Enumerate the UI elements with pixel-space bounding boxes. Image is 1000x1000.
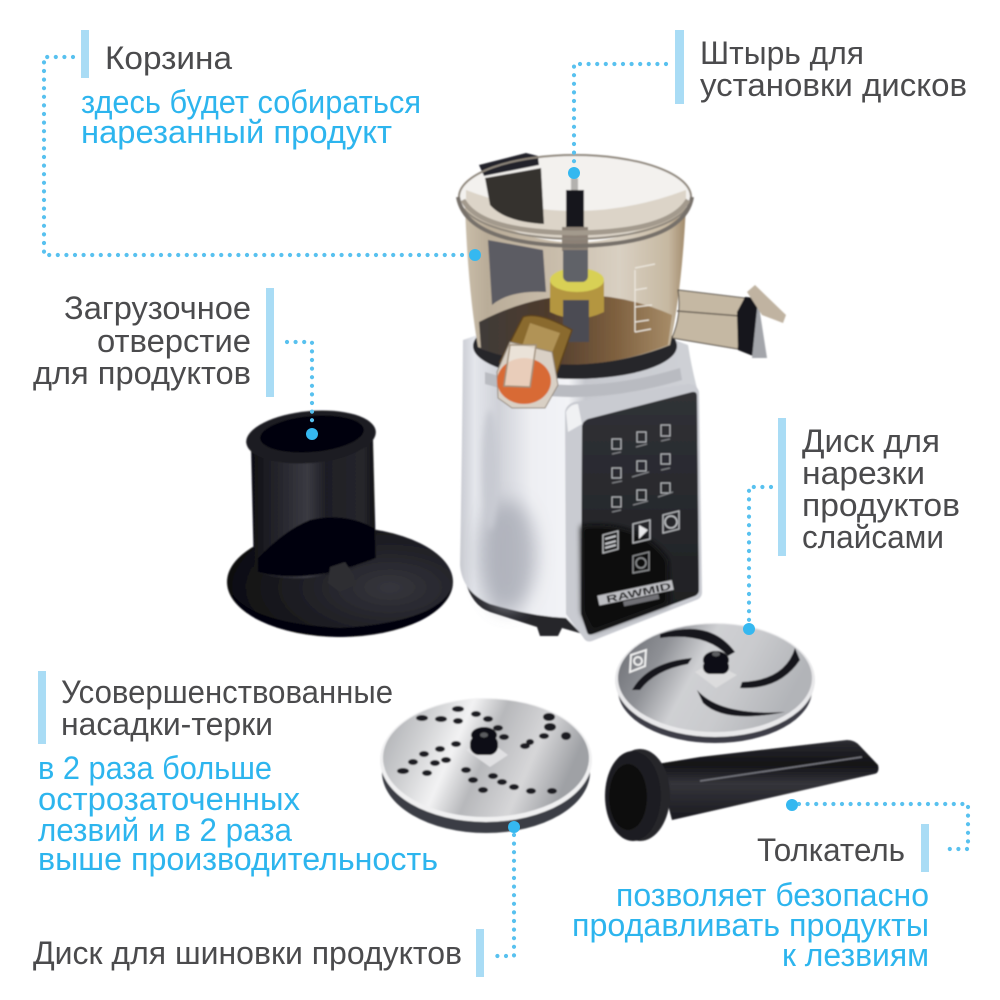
heading: Корзина bbox=[105, 40, 232, 76]
heading: Загрузочное bbox=[64, 290, 251, 326]
feeding lid with tube bbox=[227, 405, 453, 637]
description: лезвий и в 2 раза bbox=[38, 812, 292, 848]
leader line bbox=[749, 487, 771, 622]
heading: Толкатель bbox=[757, 832, 905, 868]
accent bar bbox=[778, 418, 786, 556]
marker bbox=[508, 821, 520, 833]
description: нарезанный продукт bbox=[81, 114, 392, 150]
callout: slicing disc bbox=[743, 418, 960, 635]
dark latch interior bbox=[485, 168, 544, 224]
leader line bbox=[492, 835, 514, 956]
collar shadow bbox=[485, 368, 682, 397]
shredding disc bbox=[380, 698, 592, 833]
description: острозаточенных bbox=[38, 781, 300, 817]
lid disc bbox=[227, 527, 453, 637]
accent bar bbox=[921, 824, 929, 872]
description: выше производительность bbox=[38, 841, 438, 877]
marker bbox=[469, 249, 481, 261]
leader line bbox=[799, 804, 968, 849]
measure scale bbox=[635, 264, 655, 332]
basket interior bbox=[460, 155, 690, 239]
heading: насадки-терки bbox=[61, 706, 273, 742]
leader line bbox=[287, 342, 312, 426]
heading: Диск для шиновки продуктов bbox=[33, 935, 462, 971]
contents in basket bbox=[479, 295, 672, 365]
left body shade bbox=[482, 410, 498, 530]
accent bar bbox=[38, 671, 46, 744]
heading: установки дисков bbox=[700, 67, 967, 103]
basket translucent body bbox=[465, 205, 686, 364]
product: food processor and accessories bbox=[227, 153, 878, 841]
right side spout bbox=[672, 285, 786, 358]
panel control buttons bbox=[603, 511, 679, 573]
leader line bbox=[574, 64, 666, 165]
description: в 2 раза больше bbox=[38, 750, 272, 786]
control panel glass bbox=[581, 392, 699, 635]
heading: Штырь для bbox=[700, 35, 864, 71]
marker bbox=[786, 799, 798, 811]
leader line bbox=[44, 57, 468, 255]
description: позволяет безопасно bbox=[616, 877, 929, 913]
description: к лезвиям bbox=[782, 937, 929, 973]
shredding disc hub bbox=[466, 737, 508, 767]
callout: disc spindle bbox=[568, 30, 967, 179]
accent bar bbox=[81, 30, 89, 78]
heading: нарезки bbox=[802, 455, 925, 491]
marker bbox=[568, 167, 580, 179]
spindle bbox=[550, 178, 604, 342]
slicing disc hub bbox=[695, 662, 737, 688]
blade slots bbox=[632, 629, 800, 716]
feed tube body bbox=[251, 440, 376, 578]
dark seat ring bbox=[473, 313, 677, 379]
heading bbox=[33, 290, 251, 391]
heading: Диск для bbox=[802, 423, 940, 459]
heading bbox=[700, 35, 967, 103]
disc badge icon bbox=[630, 650, 646, 672]
body reflection bbox=[480, 500, 536, 610]
tube rim bbox=[244, 405, 378, 469]
description bbox=[572, 877, 929, 973]
grater holes bbox=[397, 706, 571, 794]
motor base feet bbox=[465, 580, 600, 636]
description: здесь будет собираться bbox=[81, 84, 421, 120]
lid lock bbox=[328, 562, 356, 592]
heading bbox=[61, 674, 393, 742]
heading bbox=[802, 423, 960, 555]
callout: shredding disc bbox=[33, 821, 520, 977]
accent bar bbox=[476, 929, 484, 977]
panel brand plate: RAWMID bbox=[605, 581, 672, 606]
front feed tube bbox=[497, 316, 572, 408]
tube opening bbox=[259, 412, 365, 456]
callout: improved grater attachments bbox=[38, 671, 438, 877]
panel brand plate bbox=[597, 580, 675, 611]
basket rim bbox=[458, 155, 692, 246]
heading: слайсами bbox=[802, 519, 944, 555]
callout: basket bbox=[44, 30, 481, 261]
control panel frame bbox=[565, 384, 702, 642]
heading: продуктов bbox=[802, 487, 960, 523]
heading: отверстие bbox=[97, 323, 251, 359]
accent bar bbox=[266, 288, 274, 397]
heading: Усовершенствованные bbox=[61, 674, 393, 710]
panel program icons bbox=[612, 425, 673, 512]
description bbox=[38, 750, 438, 877]
slicing disc bbox=[615, 623, 815, 743]
panel reflection bbox=[581, 525, 668, 632]
marker bbox=[743, 623, 755, 635]
silver motor body bbox=[460, 321, 701, 640]
description: продавливать продукты bbox=[572, 907, 929, 943]
callout: feed opening bbox=[33, 288, 318, 440]
description bbox=[81, 84, 421, 150]
pusher bbox=[605, 740, 878, 841]
heading: для продуктов bbox=[33, 355, 251, 391]
callout: pusher bbox=[572, 799, 968, 973]
accent bar bbox=[675, 30, 684, 104]
marker bbox=[306, 428, 318, 440]
frame highlight bbox=[566, 404, 582, 432]
inner wall tone bbox=[466, 190, 686, 238]
